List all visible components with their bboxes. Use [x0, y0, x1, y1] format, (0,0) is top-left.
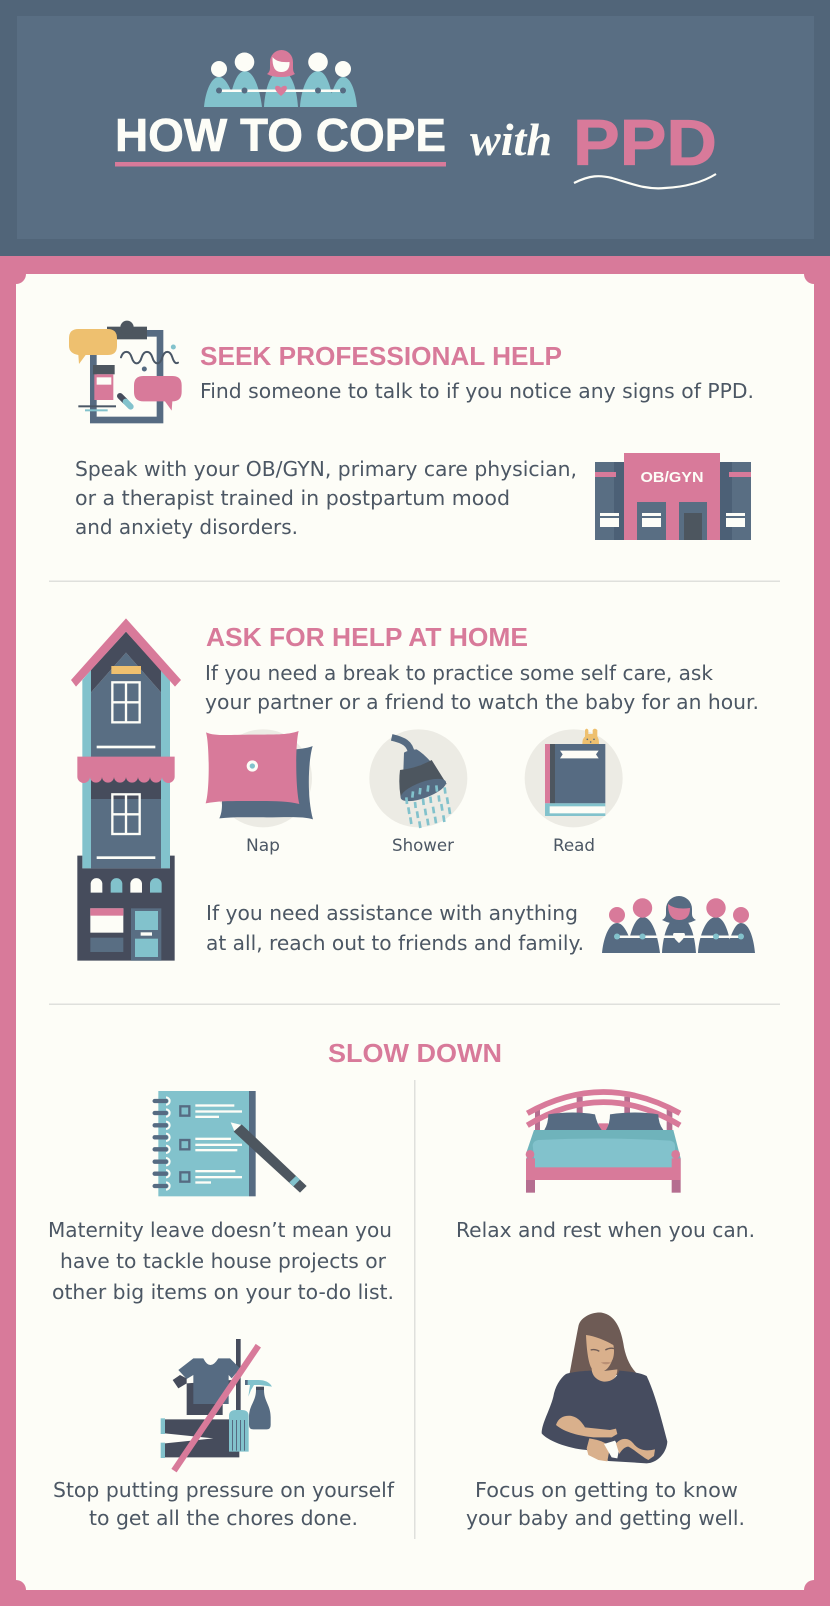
text: need a break: [205, 661, 759, 714]
text: speak with your doctor: Speak with your OB/GYN, primary care physician,: [75, 457, 577, 481]
icon: book with bunny: [525, 729, 623, 827]
section: ask for help at home: [71, 618, 759, 961]
panel: main content card: [16, 274, 814, 1590]
text: speak with your doctor: [75, 457, 577, 539]
heading: ask for help at home: ASK FOR HELP AT HOME: [206, 622, 528, 652]
text: focus on your baby: your baby and getting well.: [466, 1506, 745, 1530]
text: reach out: at all, reach out to friends and family.: [206, 931, 584, 955]
icon: bed: [526, 1092, 681, 1193]
illustration: mother holding baby: [542, 1313, 667, 1463]
icon: nap pillows: [206, 729, 313, 827]
title: PPD: PPD: [573, 106, 717, 179]
text: speak with your doctor: or a therapist trained in postpartum mood: [75, 486, 510, 510]
section: seek professional help: [69, 321, 754, 540]
icon: crossed out chores: [161, 1339, 272, 1471]
text: maternity leave: Maternity leave doesn’t mean you: [48, 1218, 392, 1242]
text: maternity leave: other big items on your to-do list.: [52, 1280, 394, 1304]
icon: family group: [204, 50, 357, 107]
text: find someone: Find someone to talk to if you notice any signs of PPD.: [200, 379, 754, 403]
label: shower: Shower: [392, 836, 454, 856]
icon: OB/GYN building: [595, 453, 751, 540]
section: slow down: [48, 1038, 755, 1539]
icon: OB/GYN building: OB/GYN: [640, 469, 704, 486]
heading: seek professional help: SEEK PROFESSIONAL HELP: [200, 341, 562, 371]
text: focus on your baby: [466, 1478, 745, 1530]
label: nap: Nap: [246, 836, 280, 856]
icon: friends and family group: [602, 896, 755, 953]
text: maternity leave: have to tackle house projects or: [60, 1249, 387, 1273]
panel: header: [0, 0, 830, 256]
text: reach out: [206, 901, 584, 955]
text: reach out: If you need assistance with anything: [206, 901, 578, 925]
icon: shower head: [369, 729, 467, 828]
icon: notebook and pencil: [155, 1091, 307, 1196]
text: stop putting pressure: to get all the chores done.: [89, 1506, 358, 1530]
icon: tall house: [71, 618, 181, 961]
text: speak with your doctor: and anxiety disorders.: [75, 515, 298, 539]
title: with: with: [470, 114, 552, 165]
text: maternity leave: [48, 1218, 394, 1304]
text: focus on your baby: Focus on getting to know: [475, 1478, 738, 1502]
heading: slow down: SLOW DOWN: [328, 1038, 502, 1068]
text: stop putting pressure: Stop putting pressure on yourself: [53, 1478, 395, 1502]
text: need a break: your partner or a friend to watch the baby for an hour.: [205, 690, 759, 714]
text: stop putting pressure: [53, 1478, 395, 1530]
text: relax and rest: Relax and rest when you can.: [456, 1218, 755, 1242]
title: how to cope: HOW TO COPE: [115, 109, 446, 161]
icon: clipboard with speech bubbles: [69, 321, 182, 420]
label: read: Read: [553, 836, 595, 856]
text: need a break: If you need a break to practice some self care, ask: [205, 661, 713, 685]
